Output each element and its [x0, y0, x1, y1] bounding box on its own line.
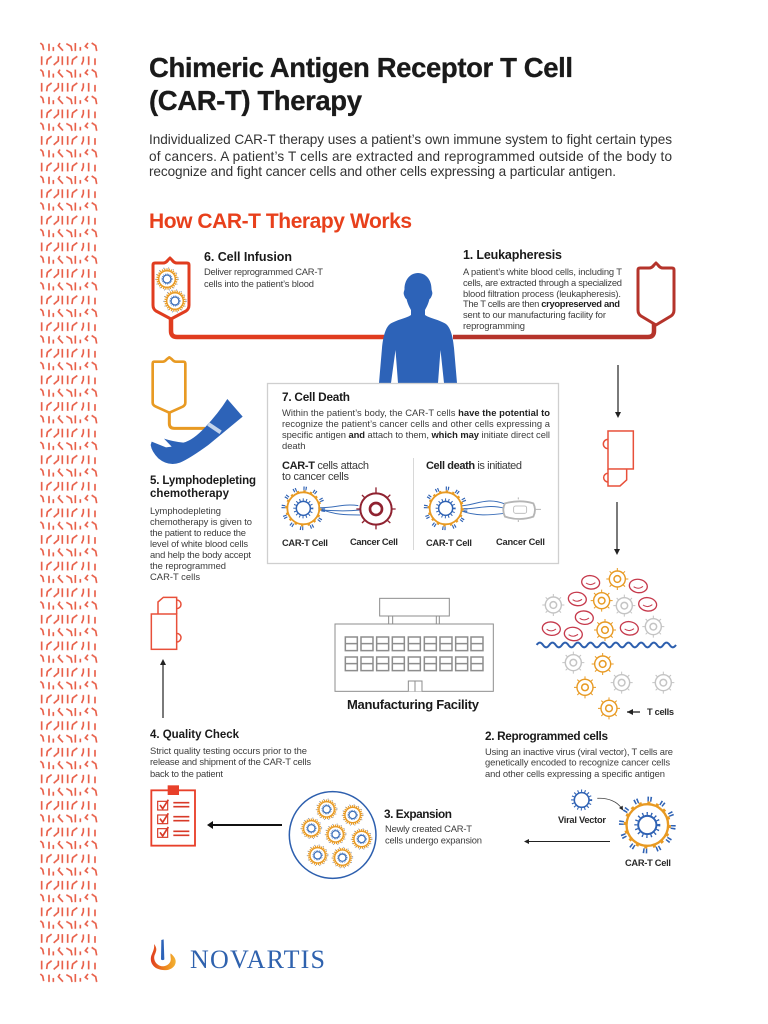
subheading: death initiated: Cell death is initiated — [426, 460, 522, 472]
label: T cells: T cells — [647, 707, 674, 717]
title: (CAR-T) Therapy — [149, 85, 363, 116]
step 1 text: sent to our manufacturing facility for — [463, 309, 606, 320]
diagram: cancer cell death — [426, 488, 541, 528]
illustration: viral vector and CAR-T cell — [573, 791, 673, 851]
step 3 text — [384, 807, 482, 846]
step 6 text: 6. Cell Infusion — [204, 250, 292, 264]
intro text — [149, 132, 672, 179]
decorative pattern strip — [38, 42, 100, 985]
step 1 text: 1. Leukapheresis — [463, 248, 562, 262]
title — [149, 52, 573, 116]
step 4 text: 4. Quality Check — [150, 729, 240, 741]
step 2 text: genetically encoded to recognize cancer cells — [485, 756, 670, 768]
arrow: up to lymphodepleting — [160, 659, 166, 718]
logo: Novartis: NOVARTIS — [190, 945, 325, 974]
step 1 text: reprogramming — [463, 320, 525, 331]
logo: Novartis — [151, 939, 325, 974]
label: viral vector: Viral Vector — [558, 815, 606, 825]
labels: Cancer Cell — [496, 537, 545, 547]
illustration: manufacturing facility — [335, 598, 493, 691]
step 5 text: CAR-T cells — [150, 571, 200, 582]
step 1 text: cells, are extracted through a specialized — [463, 277, 622, 288]
step 5 text: the reprogrammed — [150, 560, 226, 571]
labels: Cancer Cell — [350, 537, 398, 547]
icon: patient silhouette — [379, 273, 457, 383]
labels — [282, 537, 545, 548]
step 4 text — [150, 729, 311, 779]
diagram: CAR-T attached to cancer cell — [283, 487, 396, 529]
arrow: expansion to quality check — [207, 821, 282, 829]
step 5 text: the patient to reduce the — [150, 527, 246, 538]
panel body text: recognize the patient’s cancer cells and other cells expressing a — [282, 418, 551, 429]
illustration: expansion dish — [289, 792, 376, 878]
title: Chimeric Antigen Receptor T Cell — [149, 52, 573, 83]
arrow: bag to shipping box — [615, 365, 621, 418]
intro text: of cancers. A patient’s T cells are extracted and reprogrammed outside of the body to — [149, 149, 672, 164]
step 2 text: 2. Reprogrammed cells — [485, 729, 608, 743]
subheading: attach: CAR-T cells attach — [282, 460, 369, 472]
illustration: blood cells and T cells separated — [537, 568, 676, 719]
step 3 text: cells undergo expansion — [385, 834, 482, 846]
step 1 text: A patient’s white blood cells, including T — [463, 266, 622, 277]
icon: infusion bag with CAR-T cells — [153, 258, 189, 319]
subheading: attach — [282, 460, 369, 483]
step 5 text: level of white blood cells — [150, 538, 248, 549]
step 4 text: back to the patient — [150, 768, 223, 779]
labels: CAR-T Cell — [282, 538, 328, 548]
labels: CAR-T Cell — [426, 538, 472, 548]
panel heading: 7. Cell Death — [282, 390, 350, 404]
icon: chemotherapy bag and arm — [151, 357, 243, 464]
panel body text — [282, 407, 551, 451]
step 1 text: blood filtration process (leukapheresis). — [463, 288, 621, 299]
step 1 text: The T cells are then cryopreserved and — [463, 298, 620, 309]
step 1 text — [463, 248, 622, 331]
panel body text: Within the patient’s body, the CAR-T cells have the potential to — [282, 407, 550, 418]
step 4 text: release and shipment of the CAR-T cells — [150, 756, 311, 767]
panel: cell death — [268, 384, 558, 564]
subheading: attach: to cancer cells — [282, 471, 350, 483]
icon: leukapheresis bag — [638, 263, 674, 325]
panel body text: death — [282, 440, 305, 451]
step 5 text: 5. Lymphodepleting — [150, 475, 256, 487]
step 3 text: Newly created CAR-T — [385, 823, 472, 834]
step 3 text: 3. Expansion — [384, 807, 452, 821]
panel body text: specific antigen and attach to them, which may initiate direct cell — [282, 429, 550, 440]
blood line left — [171, 318, 385, 337]
icon: shipping box — [603, 431, 633, 486]
label: CAR-T cell: CAR-T Cell — [625, 858, 671, 868]
section heading: How CAR-T Therapy Works — [149, 210, 412, 233]
intro text: recognize and fight cancer cells and other cells expressing a particular antigen. — [149, 164, 616, 179]
step 2 text — [485, 729, 673, 779]
step 6 text — [204, 250, 323, 289]
step 5 text: chemotherapy is given to — [150, 516, 252, 527]
label: manufacturing facility: Manufacturing Facility — [347, 697, 480, 712]
label: T cells — [627, 707, 674, 717]
step 4 text: Strict quality testing occurs prior to the — [150, 745, 307, 756]
step 5 text: Lymphodepleting — [150, 505, 221, 516]
step 5 text: and help the body accept — [150, 549, 251, 560]
step 6 text: cells into the patient’s blood — [204, 278, 314, 289]
icon: shipping box returning — [151, 597, 181, 649]
arrow: reprogrammed to expansion — [524, 839, 610, 844]
step 2 text: and other cells expressing a specific antigen — [485, 768, 665, 779]
blood line right — [453, 324, 654, 337]
step 5 text: chemotherapy — [150, 488, 230, 500]
intro text: Individualized CAR-T therapy uses a patient’s own immune system to fight certain types — [149, 132, 672, 147]
icon: clipboard checklist — [151, 785, 195, 846]
step 2 text: Using an inactive virus (viral vector), T cells are — [485, 746, 673, 757]
step 6 text: Deliver reprogrammed CAR-T — [204, 266, 323, 277]
arrow: shipping box to cells — [614, 502, 620, 555]
step 5 text — [150, 475, 256, 582]
